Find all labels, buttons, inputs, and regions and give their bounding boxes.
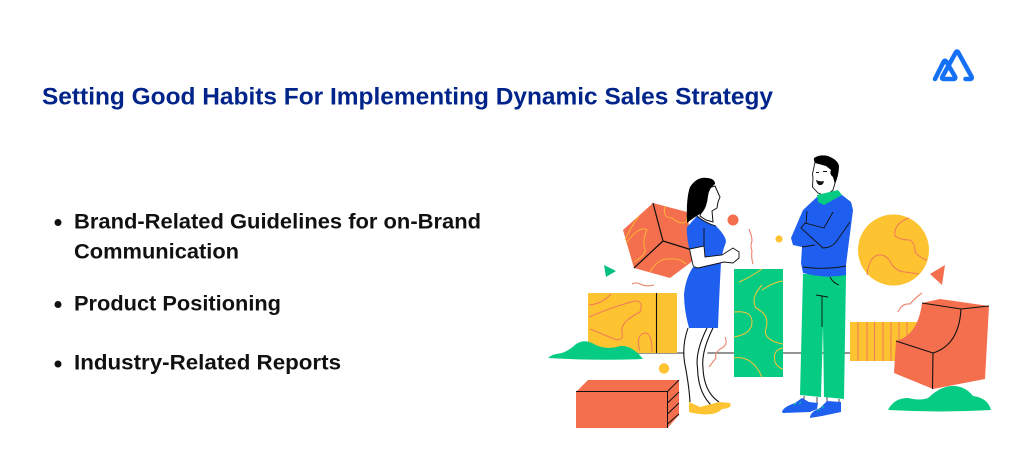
red dot [728, 214, 738, 226]
title: Setting Good Habits For Implementing Dynamic Sales Strategy [42, 84, 773, 110]
woman: head and neck [700, 186, 720, 222]
man: blue shoes [782, 398, 818, 413]
bullet item: product positioning: Product Positioning [74, 292, 281, 316]
green triangle [604, 265, 616, 277]
orange hexagonal cube [623, 203, 694, 278]
bullet list [54, 210, 481, 374]
yellow dot upper [775, 235, 783, 243]
woman: yellow shoes [689, 402, 731, 414]
yellow dot lower [659, 363, 669, 374]
green hill left [548, 341, 643, 360]
orange curved block [894, 299, 989, 389]
bullet item: brand guidelines [54, 210, 481, 264]
man [782, 155, 853, 418]
woman: dress [684, 216, 726, 328]
woman: legs [684, 328, 718, 403]
bullet item: brand guidelines: Brand-Related Guidelines for on-Brand [74, 210, 481, 234]
bullet item: brand guidelines: Communication [74, 240, 239, 264]
man: crossed arm lines [801, 211, 850, 268]
woman: arm and hand [690, 246, 739, 268]
man: trousers [800, 274, 846, 399]
man: socks [804, 396, 839, 403]
man: hair [814, 155, 839, 184]
squiggles [632, 229, 922, 367]
yellow rectangle [588, 293, 677, 353]
orange triangle [930, 265, 945, 285]
ground line [600, 352, 850, 354]
green pattern rectangle [734, 269, 783, 377]
man: head [812, 162, 835, 196]
orange brick box [576, 380, 679, 428]
bullet item: industry reports: Industry-Related Reports [74, 352, 341, 374]
woman: hair [687, 178, 715, 223]
man: collar [817, 190, 842, 205]
yellow circle with lines [858, 214, 929, 286]
man: sweater [791, 195, 853, 277]
green hill right [888, 386, 991, 412]
yellow striped rectangle [850, 322, 917, 361]
illustration: two people talking among shapes [548, 155, 991, 428]
woman [684, 178, 739, 414]
icon: company logo [935, 52, 972, 79]
